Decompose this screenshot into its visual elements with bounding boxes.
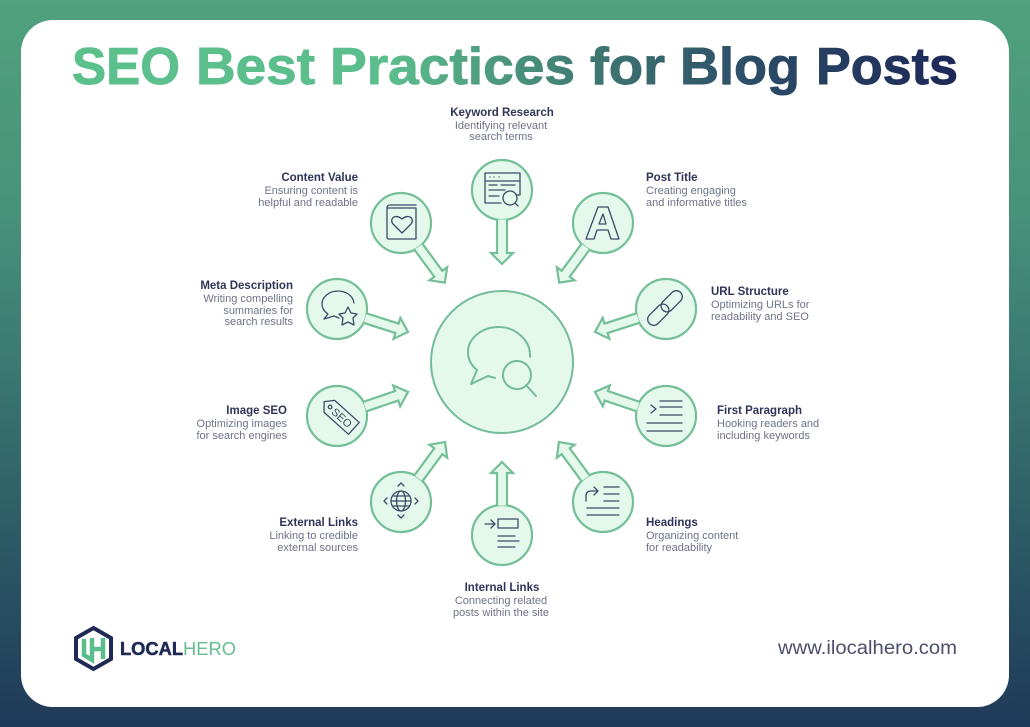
label: keyword research: Identifying relevant <box>455 120 547 132</box>
arrow: headings <box>550 436 594 485</box>
wordmark <box>120 639 236 659</box>
wordmark: LOCAL <box>120 639 183 659</box>
title: Blog <box>680 38 800 96</box>
circle: meta description <box>307 279 367 339</box>
label: image seo <box>196 405 287 442</box>
arrow: first paragraph <box>591 382 642 417</box>
label: internal links: Connecting related <box>455 595 547 607</box>
label: first paragraph: Hooking readers and <box>717 418 819 430</box>
label: first paragraph <box>717 405 819 442</box>
arrow: external links <box>410 436 454 485</box>
label: meta description <box>200 280 293 328</box>
label: external links: external sources <box>277 542 358 554</box>
icon: book with heart <box>387 205 416 239</box>
label: external links: Linking to credible <box>269 530 358 542</box>
label: post title: Post Title <box>646 172 698 184</box>
node: Keyword Research <box>450 107 554 264</box>
icon: browser with magnifier <box>485 173 520 206</box>
circle: headings <box>573 472 633 532</box>
arrow: meta description <box>362 308 411 342</box>
node: External Links <box>269 436 454 554</box>
label: meta description: summaries for <box>223 305 293 317</box>
title: Practices <box>330 38 575 96</box>
label: post title: Creating engaging <box>646 185 736 197</box>
icon: speech bubble with star <box>322 291 357 325</box>
label: content value: helpful and readable <box>258 197 358 209</box>
arrow: image seo <box>361 382 412 417</box>
label: image seo: for search engines <box>196 430 287 442</box>
label: keyword research <box>450 107 554 143</box>
node: URL Structure <box>592 279 810 342</box>
icon: seo tag: SEO <box>329 406 354 431</box>
label: external links: External Links <box>279 517 358 529</box>
label: meta description: Meta Description <box>200 280 293 292</box>
node: First Paragraph <box>591 382 819 446</box>
label: external links <box>269 517 358 554</box>
label: url structure <box>711 286 810 323</box>
label: url structure: URL Structure <box>711 286 789 298</box>
label: internal links <box>453 582 549 619</box>
label: headings: Headings <box>646 517 698 529</box>
wordmark: HERO <box>183 639 236 659</box>
node: Headings <box>550 436 738 554</box>
arrow: internal links <box>491 462 513 506</box>
label: headings <box>646 517 738 554</box>
central hub: chat and search <box>431 291 573 433</box>
label: url structure: readability and SEO <box>711 311 809 323</box>
icon: hexagon LH mark <box>76 628 111 669</box>
circle: url structure <box>636 279 696 339</box>
icon: seo tag <box>319 396 359 434</box>
label: keyword research: search terms <box>469 131 533 143</box>
circle: first paragraph <box>636 386 696 446</box>
label: image seo: Optimizing images <box>197 418 287 430</box>
label: keyword research: Keyword Research <box>450 107 554 119</box>
arrow: post title <box>550 240 594 289</box>
icon: redirected text <box>586 487 619 515</box>
label: internal links: Internal Links <box>465 582 539 594</box>
label: internal links: posts within the site <box>453 607 549 619</box>
circle: image seo <box>307 386 367 446</box>
circle: content value <box>371 193 431 253</box>
title: Posts <box>816 38 958 96</box>
node: Internal Links <box>453 462 549 619</box>
website url: www.ilocalhero.com <box>777 638 957 659</box>
label: post title: and informative titles <box>646 197 747 209</box>
label: content value: Content Value <box>281 172 358 184</box>
circle: external links <box>371 472 431 532</box>
title: for <box>590 38 665 96</box>
icon: globe with chevrons <box>384 483 418 518</box>
circle: internal links <box>472 505 532 565</box>
label: image seo: Image SEO <box>226 405 287 417</box>
node: Image SEO <box>196 382 412 446</box>
title: SEO <box>72 38 180 96</box>
label: content value <box>258 172 358 209</box>
label: meta description: search results <box>225 316 293 328</box>
icon: chain link <box>645 288 685 328</box>
label: url structure: Optimizing URLs for <box>711 299 810 311</box>
label: headings: Organizing content <box>646 530 738 542</box>
label: post title <box>646 172 747 209</box>
title <box>72 38 958 96</box>
circle: keyword research <box>472 160 532 220</box>
arrow: url structure <box>592 308 641 342</box>
icon: arrow to box with text <box>485 519 519 547</box>
icon: letter A <box>586 207 619 239</box>
title: Best <box>196 38 315 96</box>
node: Meta Description <box>200 279 411 342</box>
label: meta description: Writing compelling <box>203 293 293 305</box>
icon: indented text <box>647 401 682 431</box>
logo: Local Hero <box>76 628 236 669</box>
node: Content Value <box>258 172 454 289</box>
circle: post title <box>573 193 633 253</box>
node: Post Title <box>550 172 747 289</box>
label: headings: for readability <box>646 542 713 554</box>
label: first paragraph: First Paragraph <box>717 405 802 417</box>
arrow: content value <box>410 240 454 289</box>
label: first paragraph: including keywords <box>717 430 810 442</box>
arrow: keyword research <box>491 220 513 264</box>
label: content value: Ensuring content is <box>264 185 358 197</box>
